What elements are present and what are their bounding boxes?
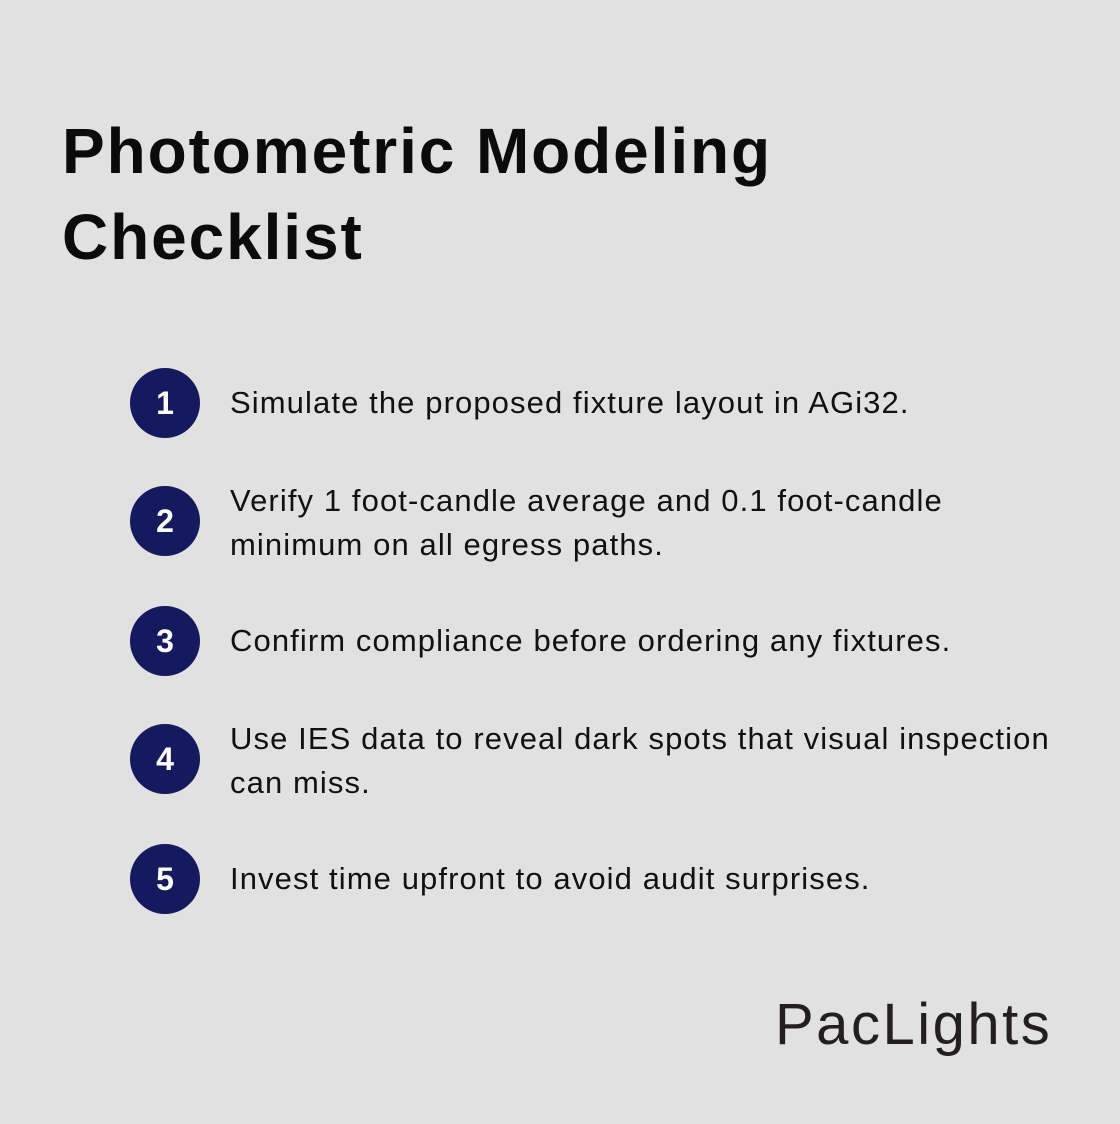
- item 3: Confirm compliance before ordering any fixtures.: [230, 623, 951, 658]
- item 5: Invest time upfront to avoid audit surprises.: [230, 861, 871, 896]
- item 3: [130, 606, 951, 676]
- item 1: Simulate the proposed fixture layout in AGi32.: [230, 385, 910, 420]
- item 1: [130, 368, 910, 438]
- item 3: 3: [156, 623, 174, 659]
- item 2: minimum on all egress paths.: [230, 527, 664, 562]
- item 2: 2: [156, 503, 174, 539]
- item 5: 5: [156, 861, 174, 897]
- item 5: [130, 844, 871, 914]
- item 4: can miss.: [230, 765, 371, 800]
- item 4: Use IES data to reveal dark spots that visual inspection: [230, 721, 1050, 756]
- item 1: 1: [156, 385, 174, 421]
- item 2: Verify 1 foot-candle average and 0.1 foot-candle: [230, 483, 943, 518]
- title: Photometric Modeling: [62, 115, 772, 187]
- item 2: [130, 483, 943, 562]
- title: Checklist: [62, 201, 364, 273]
- item 4: 4: [156, 741, 174, 777]
- title: [62, 115, 772, 273]
- item 4: [130, 721, 1050, 800]
- logo: PacLights: [775, 992, 1052, 1057]
